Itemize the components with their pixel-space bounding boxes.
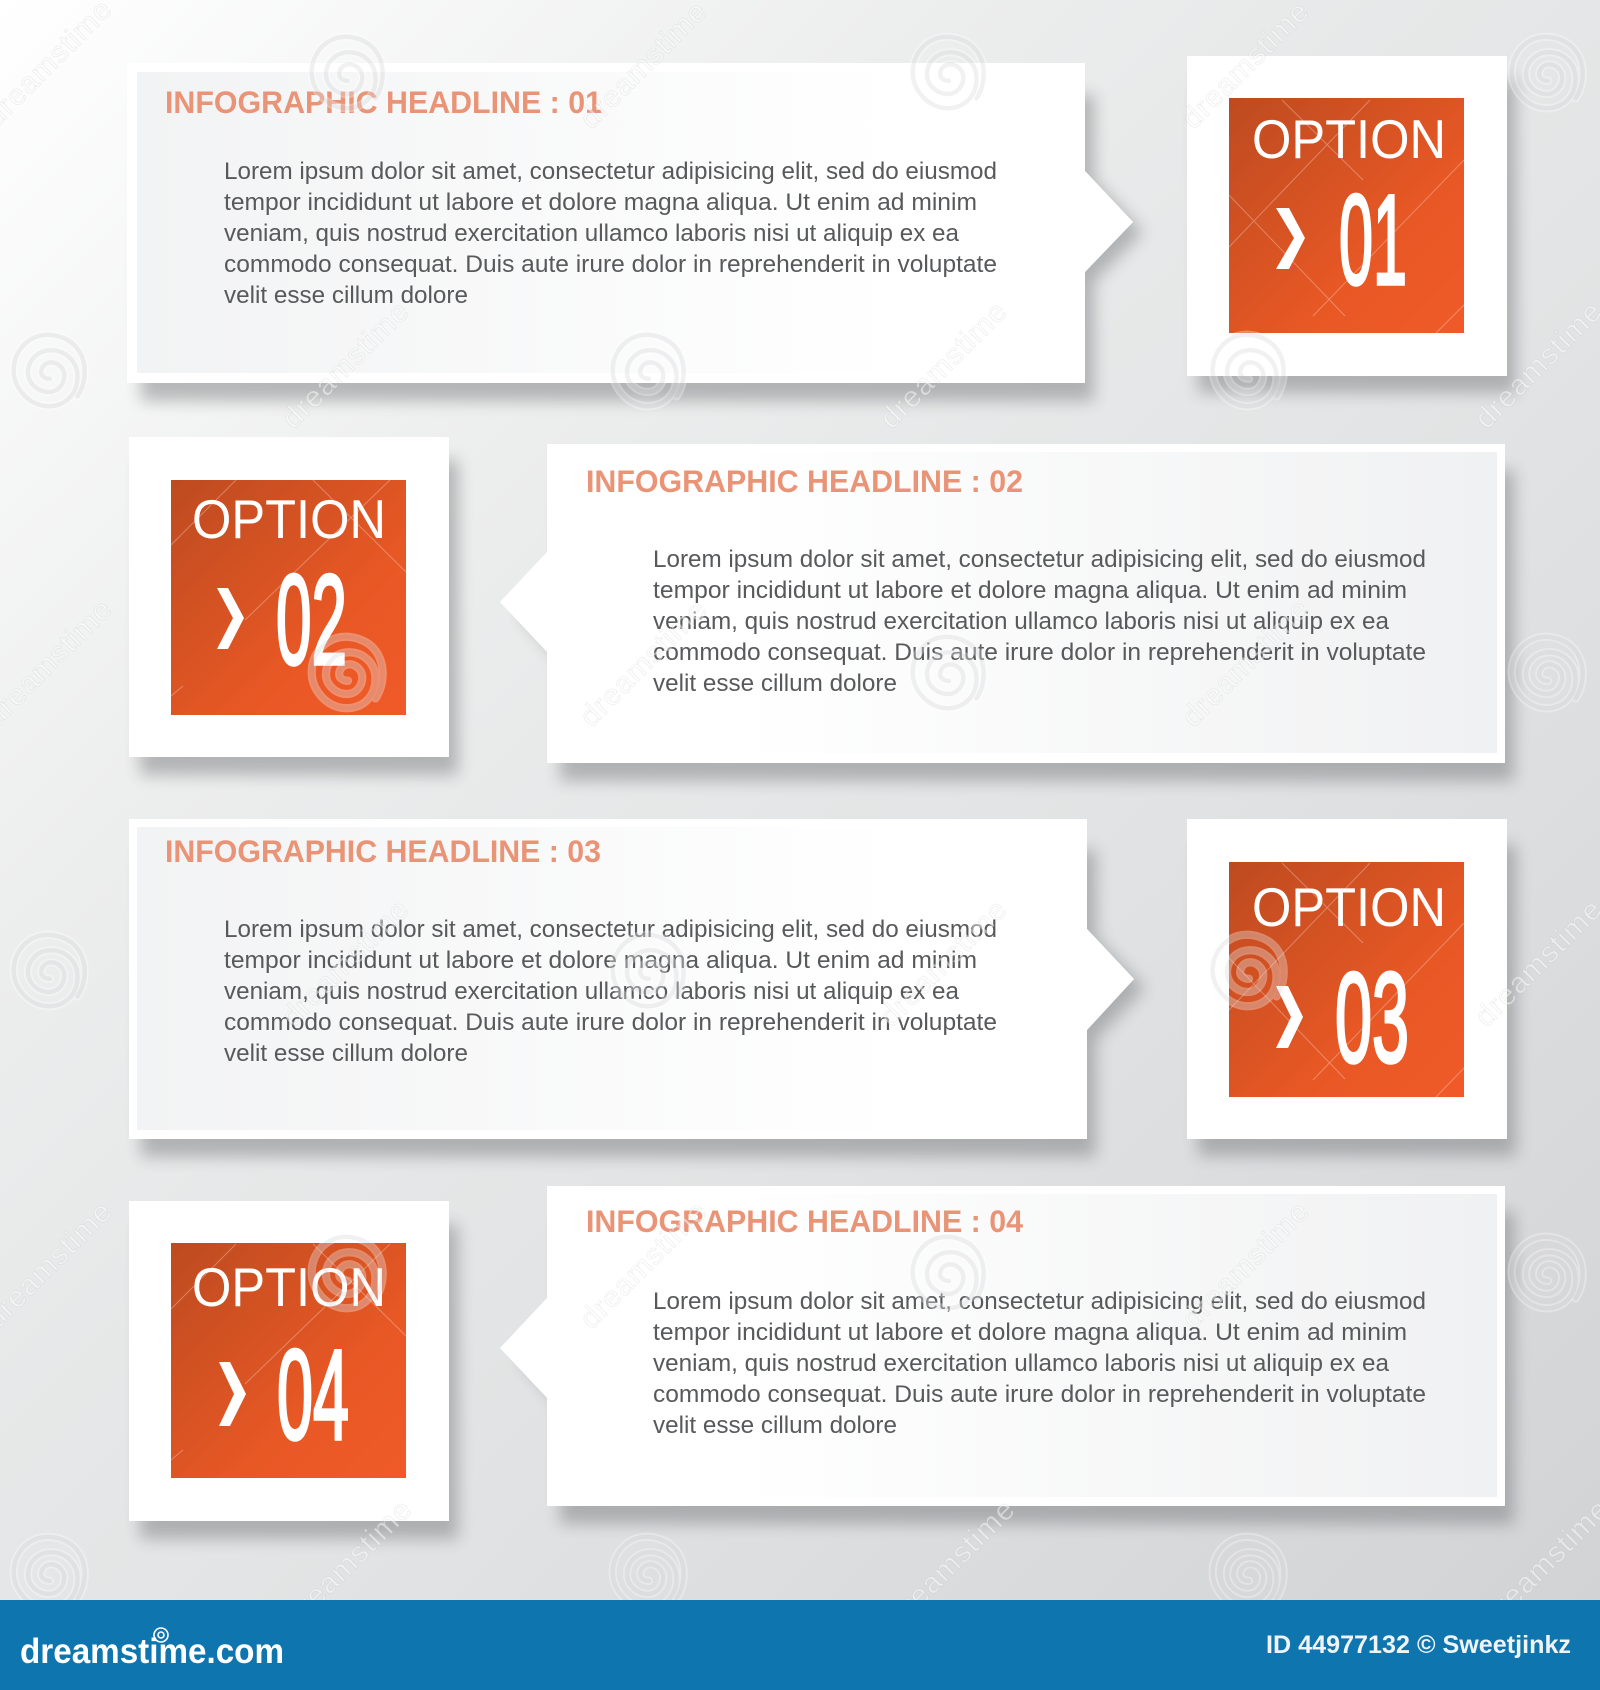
body text 04: commodo consequat. Duis aute irure dolor in reprehenderit in voluptate xyxy=(653,1381,1426,1408)
icon: chevron 01 xyxy=(1276,208,1305,269)
label: option 03: OPTION xyxy=(1252,876,1446,938)
watermark: diagonal dreamstime text: dreamstime xyxy=(881,1493,1021,1633)
watermark: diagonal dreamstime text: dreamstime xyxy=(873,893,1013,1033)
label: option 02: OPTION xyxy=(192,488,386,550)
watermark: diagonal dreamstime text: dreamstime xyxy=(275,295,415,435)
body text 03: commodo consequat. Duis aute irure dolor in reprehenderit in voluptate xyxy=(224,1009,997,1036)
footer bar xyxy=(0,1600,1600,1690)
body text 04: velit esse cillum dolore xyxy=(653,1412,897,1439)
watermark: diagonal dreamstime text: dreamstime xyxy=(1175,1195,1315,1335)
watermark: diagonal dreamstime text: dreamstime xyxy=(573,593,713,733)
card: option 03 xyxy=(1187,819,1507,1139)
body text 03: veniam, quis nostrud exercitation ullamco laboris nisi ut aliquip ex ea xyxy=(224,978,959,1005)
body text 02: tempor incididunt ut labore et dolore magna aliqua. Ut enim ad minim xyxy=(653,577,1407,604)
heading 01: INFOGRAPHIC HEADLINE : 01 xyxy=(165,84,602,120)
heading 02: INFOGRAPHIC HEADLINE : 02 xyxy=(586,463,1023,499)
body text 03: tempor incididunt ut labore et dolore magna aliqua. Ut enim ad minim xyxy=(224,947,977,974)
icon: chevron 02 xyxy=(217,588,244,649)
label: option 04: OPTION xyxy=(192,1256,386,1318)
body text 02: Lorem ipsum dolor sit amet, consectetur adipisicing elit, sed do eiusmod xyxy=(653,546,1426,573)
panel: headline 02 xyxy=(500,444,1505,763)
body text 04: tempor incididunt ut labore et dolore magna aliqua. Ut enim ad minim xyxy=(653,1319,1407,1346)
heading 04: INFOGRAPHIC HEADLINE : 04 xyxy=(586,1203,1023,1239)
body text 01: veniam, quis nostrud exercitation ullamco laboris nisi ut aliquip ex ea xyxy=(224,220,959,247)
number 03: 03 xyxy=(1335,947,1409,1090)
label: option 01: OPTION xyxy=(1252,108,1446,170)
card: option 02 xyxy=(129,437,449,757)
footer logo text: dreamstime.com xyxy=(20,1632,284,1671)
icon: chevron 03 xyxy=(1276,986,1303,1048)
card: option 01 xyxy=(1187,56,1507,376)
watermark: diagonal dreamstime text: dreamstime xyxy=(873,295,1013,435)
body text 01: tempor incididunt ut labore et dolore magna aliqua. Ut enim ad minim xyxy=(224,189,977,216)
body text 02: veniam, quis nostrud exercitation ullamco laboris nisi ut aliquip ex ea xyxy=(653,608,1389,635)
body text 01: velit esse cillum dolore xyxy=(224,282,468,309)
body text 03: Lorem ipsum dolor sit amet, consectetur adipisicing elit, sed do eiusmod xyxy=(224,916,997,943)
card: option 02: 02 xyxy=(276,549,347,692)
card: option 04 xyxy=(129,1201,449,1521)
body text 03: velit esse cillum dolore xyxy=(224,1040,468,1067)
body text 01: Lorem ipsum dolor sit amet, consectetur adipisicing elit, sed do eiusmod xyxy=(224,158,997,185)
body text 02: commodo consequat. Duis aute irure dolor in reprehenderit in voluptate xyxy=(653,639,1426,666)
body text 01: commodo consequat. Duis aute irure dolor in reprehenderit in voluptate xyxy=(224,251,997,278)
watermark: diagonal dreamstime text: dreamstime xyxy=(1175,593,1315,733)
body text 04: Lorem ipsum dolor sit amet, consectetur adipisicing elit, sed do eiusmod xyxy=(653,1288,1426,1315)
watermark: diagonal dreamstime text: dreamstime xyxy=(275,893,415,1033)
body text 04: veniam, quis nostrud exercitation ullamco laboris nisi ut aliquip ex ea xyxy=(653,1350,1389,1377)
body text 04 xyxy=(653,1288,1426,1439)
icon: chevron 04 xyxy=(219,1362,246,1426)
body text 02: velit esse cillum dolore xyxy=(653,670,897,697)
body text 01 xyxy=(224,158,997,309)
heading 03: INFOGRAPHIC HEADLINE : 03 xyxy=(165,833,601,869)
body text 02 xyxy=(653,546,1426,697)
number 04: 04 xyxy=(277,1324,349,1467)
card: option 01: 01 xyxy=(1339,169,1407,312)
image id and credit: ID 44977132 © Sweetjinkz xyxy=(1266,1631,1571,1659)
panel: headline 01 xyxy=(127,63,1133,383)
panel: headline 03 xyxy=(129,819,1134,1139)
watermark: diagonal dreamstime text: dreamstime xyxy=(278,1493,418,1633)
body text 03 xyxy=(224,916,997,1067)
icon: logo spiral xyxy=(154,1628,168,1642)
watermark: diagonal dreamstime text: dreamstime xyxy=(573,1195,713,1335)
panel: headline 04 xyxy=(500,1186,1505,1506)
